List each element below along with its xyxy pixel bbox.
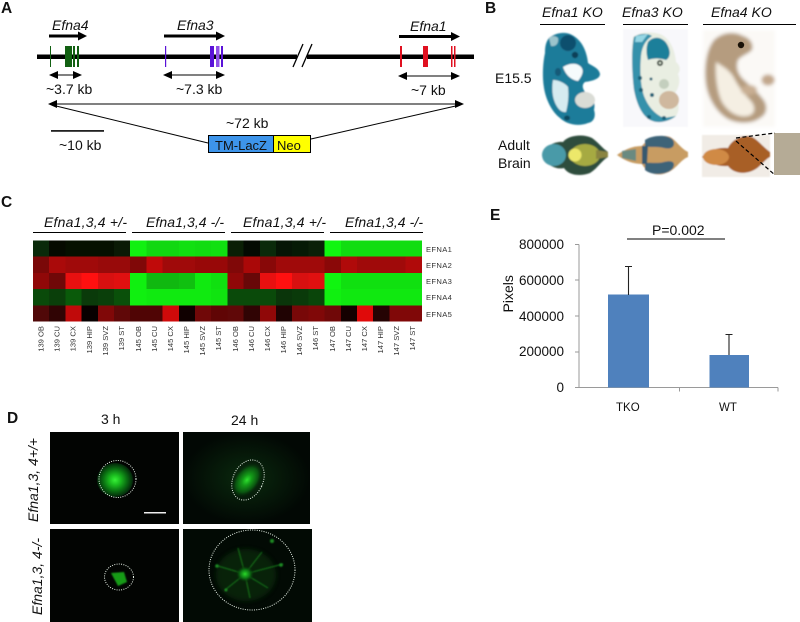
gene row labels: EFNA5: [426, 310, 452, 319]
y axis tick labels: 800000: [519, 237, 564, 252]
size labels: [46, 81, 446, 131]
y axis tick labels: 200000: [519, 344, 564, 359]
sample column labels: 147 HIP: [376, 326, 385, 353]
gene direction arrows: [49, 32, 460, 41]
embryo Efna1 KO: [543, 33, 600, 125]
sample column labels: 145 CU: [150, 326, 159, 352]
genotype headings: [33, 214, 423, 232]
sample column labels: 139 ST: [117, 326, 126, 350]
gene labels: Efna3: [177, 17, 214, 33]
sample column labels: 139 OB: [36, 326, 46, 352]
column headings: Efna3 KO: [622, 4, 683, 20]
size labels: ~72 kb: [226, 115, 269, 131]
sample column labels: 147 ST: [408, 326, 417, 350]
x axis labels: [616, 402, 737, 414]
gene labels: Efna4: [52, 17, 89, 33]
significance annotation: [627, 222, 725, 240]
y axis tick labels: [519, 237, 564, 395]
sample column labels: 146 HIP: [279, 326, 288, 353]
gene row labels: EFNA2: [426, 261, 452, 270]
size arrows: [49, 75, 463, 104]
targeting lines: [52, 105, 460, 143]
gene row labels: EFNA1: [426, 245, 452, 254]
sample column labels: 146 CU: [247, 326, 256, 352]
sample column labels: 145 CX: [166, 326, 175, 351]
micrograph 24 h wild type: [183, 432, 310, 524]
sample column labels: 147 SVZ: [392, 326, 401, 356]
panel C: expression heatmap: [1, 194, 452, 356]
EFNA2 row: [33, 257, 422, 273]
panel B: KO embryos and brains: [485, 0, 800, 177]
sample column labels: 145 HIP: [182, 326, 191, 353]
sample column labels: 139 SVZ: [101, 326, 110, 356]
Efna3 exons: [165, 46, 223, 67]
panel D: fluorescence micrographs: [7, 410, 312, 622]
y axis tick labels: 0: [556, 380, 564, 395]
sample column labels: 147 CX: [360, 326, 369, 351]
embryo Efna3 KO: [623, 29, 688, 127]
chromosome line with break: [37, 44, 474, 67]
bar TKO: [608, 266, 649, 388]
genotype side labels: Efna1,3, 4-/-: [29, 538, 45, 615]
EFNA3 row: [33, 273, 422, 289]
x axis labels: WT: [719, 402, 737, 414]
y axis tick labels: 400000: [519, 309, 564, 324]
x axis labels: TKO: [616, 402, 640, 414]
sample column labels: 145 SVZ: [198, 326, 207, 356]
embryo Efna4 KO: [703, 30, 775, 127]
sample column labels: [36, 326, 417, 356]
scale bar: ~10 kb: [59, 137, 102, 153]
EFNA1 row: [33, 240, 422, 257]
y axis title: Pixels: [500, 275, 516, 312]
heatmap grid: [33, 240, 422, 322]
time headings: 3 h: [101, 411, 120, 427]
axes: [575, 244, 778, 392]
gene row labels: [426, 245, 452, 319]
micrograph 24 h knockout: [183, 529, 312, 622]
row labels: Adult: [498, 137, 530, 153]
bar WT: [710, 334, 749, 388]
sample column labels: 139 HIP: [85, 326, 94, 353]
gene row labels: EFNA4: [426, 293, 452, 302]
genotype headings: Efna1,3,4 +/-: [44, 214, 127, 230]
brain Efna3 KO: [617, 136, 688, 174]
size labels: ~7 kb: [411, 82, 446, 98]
sample column labels: 145 OB: [134, 326, 143, 352]
row labels: E15.5: [495, 70, 532, 86]
sample column labels: 146 ST: [311, 326, 320, 350]
micrograph 3 h knockout: [50, 529, 179, 622]
inset micrograph: [774, 133, 800, 175]
size labels: ~3.7 kb: [46, 81, 93, 97]
sample column labels: 146 SVZ: [295, 326, 304, 356]
cassette TM-LacZ Neo: Neo: [277, 138, 301, 153]
panel E: bar chart: [490, 207, 778, 414]
y axis tick labels: 600000: [519, 273, 564, 288]
Efna1 exons: [400, 46, 456, 67]
Efna4 exons: [50, 46, 79, 67]
genotype headings: Efna1,3,4 -/-: [345, 214, 423, 230]
sample column labels: 147 CU: [344, 326, 353, 352]
sample column labels: 145 ST: [214, 326, 223, 350]
brain Efna1 KO: [542, 135, 608, 175]
panel A: gene locus diagram: [1, 0, 474, 153]
panel label B: B: [485, 0, 496, 17]
micrograph 3 h wild type: [50, 432, 179, 524]
genotype side labels: Efna1,3, 4+/+: [25, 438, 41, 522]
panel label A: A: [1, 0, 12, 17]
significance annotation: P=0.002: [652, 222, 705, 238]
gene labels: [52, 17, 447, 34]
brain Efna4 KO: [702, 135, 770, 177]
row labels: Brain: [498, 155, 531, 171]
column headings: [540, 4, 796, 24]
genotype side labels: [25, 438, 45, 615]
row labels: [495, 70, 532, 171]
sample column labels: 139 CU: [52, 326, 62, 352]
sample column labels: 146 CX: [263, 326, 272, 351]
gene row labels: EFNA3: [426, 277, 452, 286]
column headings: Efna1 KO: [542, 4, 603, 20]
panel label D: D: [7, 410, 18, 427]
EFNA4 row: [33, 289, 422, 305]
time headings: [101, 411, 258, 428]
panel label E: E: [490, 207, 500, 224]
zoom dashes: [736, 133, 775, 175]
embryo eye: [738, 42, 744, 48]
size labels: ~7.3 kb: [176, 81, 223, 97]
time headings: 24 h: [231, 412, 258, 428]
gene labels: Efna1: [410, 18, 447, 34]
panel label C: C: [1, 194, 12, 211]
sample column labels: 146 OB: [231, 326, 240, 352]
EFNA5 row: [33, 305, 422, 322]
scale bar: [51, 130, 104, 153]
column headings: Efna4 KO: [711, 4, 772, 20]
sample column labels: 147 OB: [328, 326, 337, 352]
cassette TM-LacZ Neo: [208, 136, 310, 153]
genotype headings: Efna1,3,4 -/-: [146, 214, 224, 230]
genotype headings: Efna1,3,4 +/-: [243, 214, 326, 230]
cassette TM-LacZ Neo: TM-LacZ: [215, 138, 267, 153]
sample column labels: 139 CX: [68, 326, 78, 351]
